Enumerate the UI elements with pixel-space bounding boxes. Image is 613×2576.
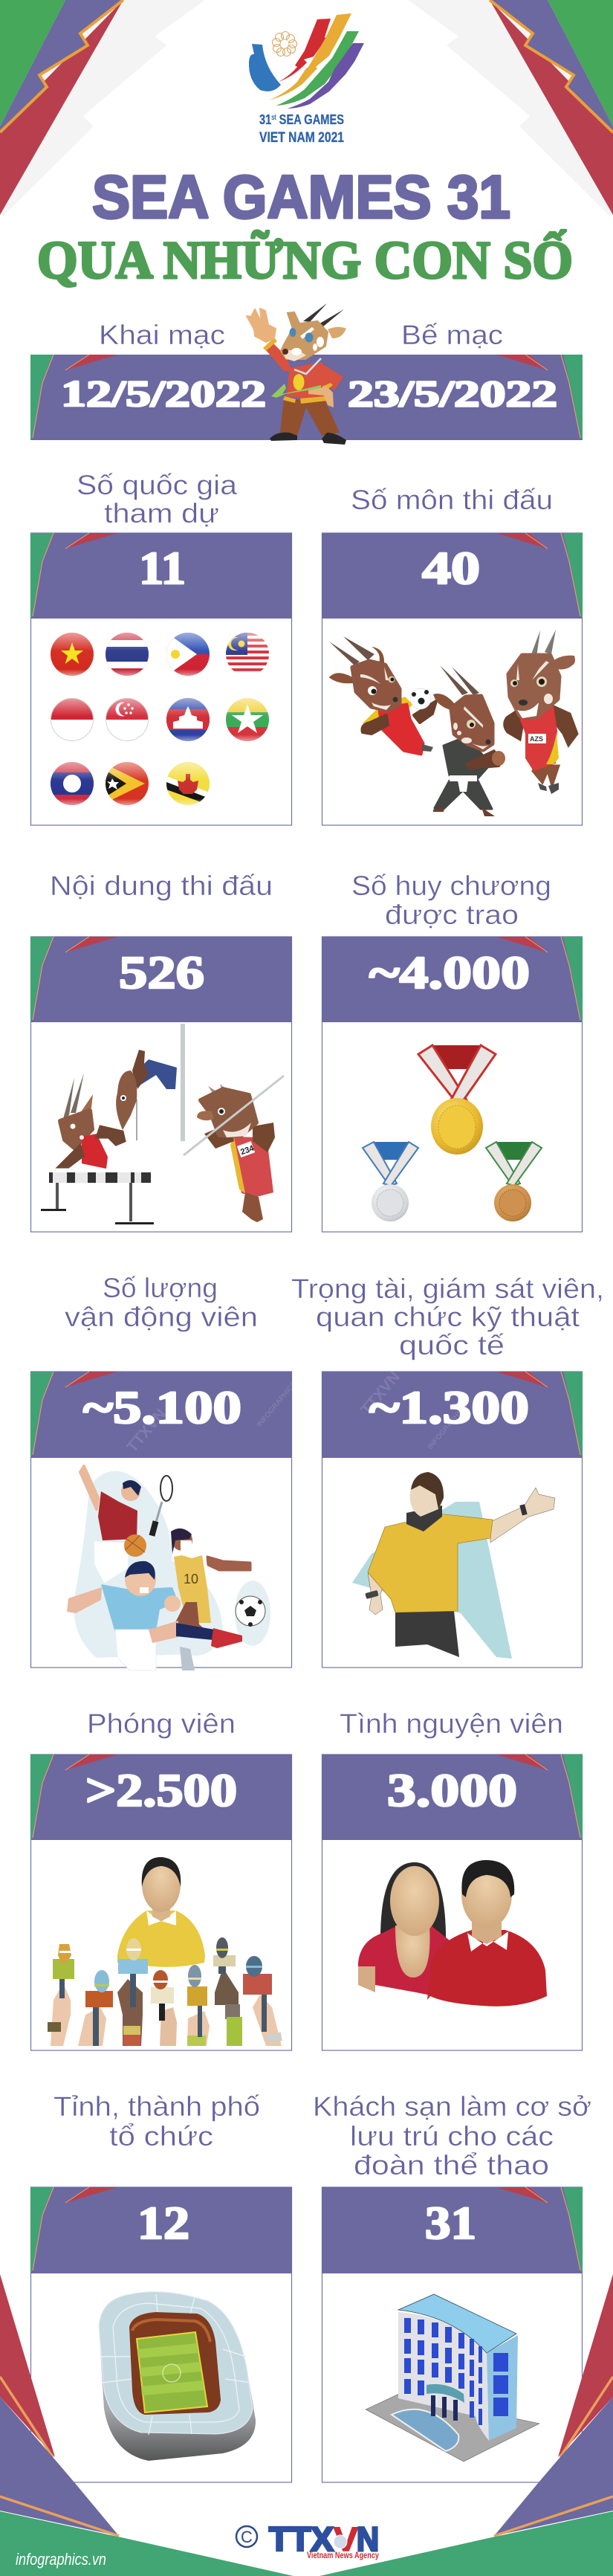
label: Khách sạn làm cơ sở lưu trú cho các đoàn thể thao: lưu trú cho các [350, 2121, 554, 2151]
icon: copyright [236, 2526, 257, 2547]
label: Số quốc gia tham dự: Số quốc gia [77, 470, 237, 500]
number: ~5.100: ~5.100 [83, 1383, 241, 1433]
label: Tỉnh, thành phố tổ chức: Tỉnh, thành phố [53, 2091, 260, 2122]
icon: two volunteers [358, 1860, 547, 2007]
decoration: top-left corner curtain [0, 0, 205, 216]
icon: reporter with microphones [48, 1857, 282, 2046]
number: 11: 11 [139, 543, 186, 594]
label: Số môn thi đấu: Số môn thi đấu [351, 485, 553, 515]
label: Tỉnh, thành phố tổ chức [53, 2091, 260, 2151]
icon: hotel building [366, 2294, 539, 2462]
logo: 31st SEA Games [249, 13, 364, 146]
watermark: INFOGRAPHICS [256, 1380, 299, 1429]
watermark: INFOGRAPHICS [426, 1402, 470, 1451]
panel: hotels [313, 2091, 591, 2482]
icon: gold medal [418, 1045, 496, 1155]
number: 40: 40 [422, 543, 480, 594]
icon: bronze medal [486, 1142, 542, 1221]
label: Phóng viên: Phóng viên [87, 1708, 236, 1739]
logo: 31st SEA Games: VIET NAM 2021 [259, 130, 344, 146]
panel: host provinces [30, 2091, 292, 2482]
logo: 31st SEA Games: SEA GAMES [276, 112, 344, 127]
icon: goat mascot [247, 303, 346, 445]
decoration: bottom-left corner [0, 2274, 293, 2576]
label: Số lượng vận động viên: vận động viên [65, 1302, 258, 1332]
label: Khách sạn làm cơ sở lưu trú cho các đoàn thể thao: đoàn thể thao [354, 2150, 549, 2180]
label: Tỉnh, thành phố tổ chức: tổ chức [109, 2121, 213, 2151]
logo: TTXVN Vietnam News Agency [269, 2520, 379, 2560]
panel: participating countries [30, 470, 292, 825]
label: Số lượng vận động viên [65, 1273, 258, 1332]
number: ~4.000: ~4.000 [369, 948, 530, 998]
number: 12: 12 [137, 2198, 189, 2249]
logo: 31st SEA Games: st [271, 114, 276, 122]
label: Khách sạn làm cơ sở lưu trú cho các đoàn thể thao [313, 2091, 591, 2180]
icon: three sport mascots [329, 630, 577, 816]
icon: athletics mascots: 234 [239, 1143, 256, 1157]
label: Khách sạn làm cơ sở lưu trú cho các đoàn thể thao: Khách sạn làm cơ sở [313, 2091, 591, 2122]
number: 31: 31 [425, 2198, 476, 2249]
icon: sport players [67, 1466, 270, 1670]
number: 3.000: 3.000 [387, 1766, 517, 1816]
icon: silver medal [363, 1142, 418, 1221]
label: Số huy chương được trao: Số huy chương [351, 871, 551, 901]
panel: events [30, 871, 292, 1232]
label: Trọng tài, giám sát viên, quan chức kỹ thuật quốc tế [291, 1274, 604, 1360]
label: Trọng tài, giám sát viên, quan chức kỹ thuật quốc tế: Trọng tài, giám sát viên, [291, 1274, 604, 1304]
icon: sport players: 10 [184, 1572, 198, 1586]
panel: athletes [30, 1273, 299, 1670]
label: Tình nguyện viên: Tình nguyện viên [340, 1708, 563, 1739]
source: infographics.vn: infographics.vn [16, 2550, 106, 2569]
label: Nội dung thi đấu: Nội dung thi đấu [50, 871, 273, 901]
label: Bế mạc: Bế mạc [401, 320, 503, 350]
watermark [123, 1380, 299, 1456]
opening date: 12/5/2022 [61, 372, 266, 414]
logo: TTXVN Vietnam News Agency: TTX [269, 2520, 334, 2558]
watermark: TTXVN [123, 1406, 169, 1456]
subtitle: QUA NHỮNG CON SỐ: QUA NHỮNG CON SỐ [37, 230, 573, 290]
icon: athletics mascots [41, 1024, 284, 1224]
decoration: bottom-right corner [320, 2274, 613, 2576]
icon: flags of 11 countries [51, 633, 269, 805]
label: Số quốc gia tham dự [77, 470, 237, 529]
panel: volunteers [322, 1708, 583, 2050]
logo: TTXVN Vietnam News Agency: V [334, 2520, 358, 2558]
title: SEA GAMES 31: SEA GAMES 31 [92, 164, 510, 231]
label: Số lượng vận động viên: Số lượng [103, 1273, 218, 1303]
number: >2.500: >2.500 [85, 1766, 237, 1816]
panel: referees [291, 1274, 604, 1668]
watermark [357, 1369, 470, 1451]
icon: three sport mascots: AZS [530, 735, 543, 743]
logo: 31st SEA Games: 31 [259, 112, 274, 127]
number: ~1.300: ~1.300 [369, 1383, 529, 1433]
icon: copyright: C [241, 2528, 253, 2546]
label: Số quốc gia tham dự: tham dự [104, 498, 219, 529]
label: Khai mạc: Khai mạc [99, 320, 225, 350]
number: 526: 526 [119, 948, 204, 998]
decoration: top-right corner curtain [408, 0, 613, 216]
label: Trọng tài, giám sát viên, quan chức kỹ thuật quốc tế: quan chức kỹ thuật [316, 1302, 580, 1332]
logo: TTXVN Vietnam News Agency: Vietnam News Agency [307, 2551, 379, 2560]
label: Trọng tài, giám sát viên, quan chức kỹ thuật quốc tế: quốc tế [399, 1330, 505, 1360]
closing date: 23/5/2022 [348, 372, 557, 414]
watermark: TTXVN [357, 1369, 403, 1418]
icon: referee [352, 1472, 555, 1659]
icon: stadium [99, 2292, 256, 2461]
panel: reporters [30, 1708, 292, 2050]
panel: medals [322, 871, 583, 1232]
panel: dates band [30, 355, 583, 440]
label: Số huy chương được trao [351, 871, 551, 930]
logo: TTXVN Vietnam News Agency: N [357, 2520, 379, 2558]
label: Số huy chương được trao: được trao [385, 900, 519, 930]
panel: number of sports [322, 485, 583, 825]
